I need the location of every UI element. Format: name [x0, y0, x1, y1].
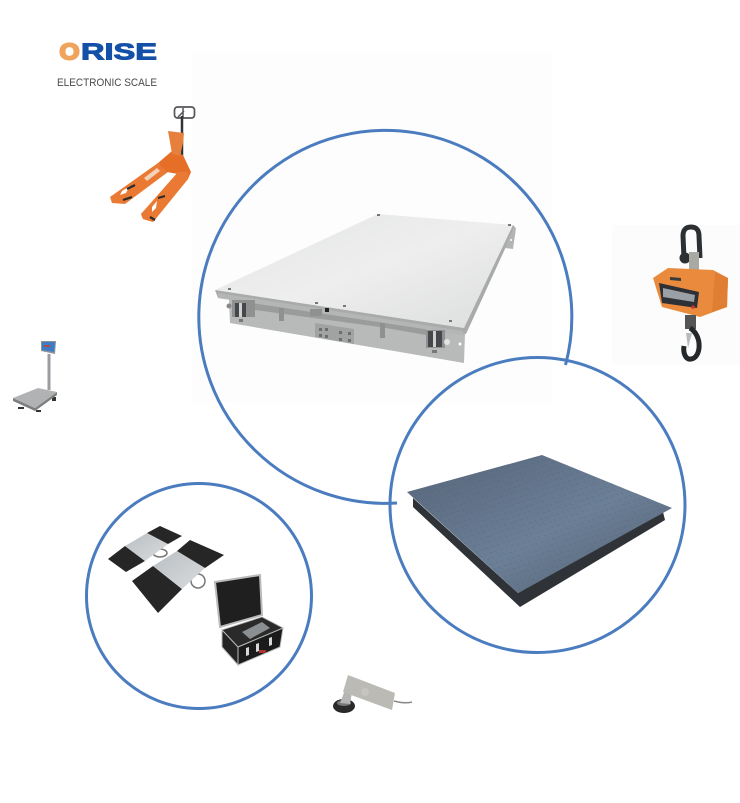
platform rim [215, 225, 515, 334]
left pocket [232, 300, 255, 322]
circle outline: floor scale [390, 358, 685, 652]
logo letter O: O [60, 40, 80, 65]
centre joint plate [315, 323, 354, 344]
product: portable axle pads and case [108, 526, 283, 665]
logo letters RISE: RISE [81, 38, 157, 64]
subtitle: ELECTRONIC SCALE [57, 77, 157, 89]
icon: bench scale [13, 341, 57, 412]
right pocket [426, 330, 445, 353]
floor scale side [413, 498, 665, 607]
icon: load cell [333, 675, 412, 713]
platform top [215, 214, 513, 328]
bolts [228, 214, 511, 322]
logo [60, 38, 157, 65]
floor scale top [407, 455, 672, 593]
platform skirt [229, 298, 465, 363]
support ribs [279, 308, 385, 338]
rear pad [108, 526, 182, 572]
circle outline: large platform [199, 130, 572, 503]
icon: pallet truck scale [110, 107, 194, 222]
product: tread plate floor scale [407, 455, 672, 607]
carrying case [215, 575, 283, 665]
side bracket [505, 227, 516, 249]
product: large steel platform [215, 214, 516, 363]
icon: crane scale [653, 227, 728, 359]
circle outline: axle pads [86, 484, 312, 708]
front pad [132, 540, 224, 613]
